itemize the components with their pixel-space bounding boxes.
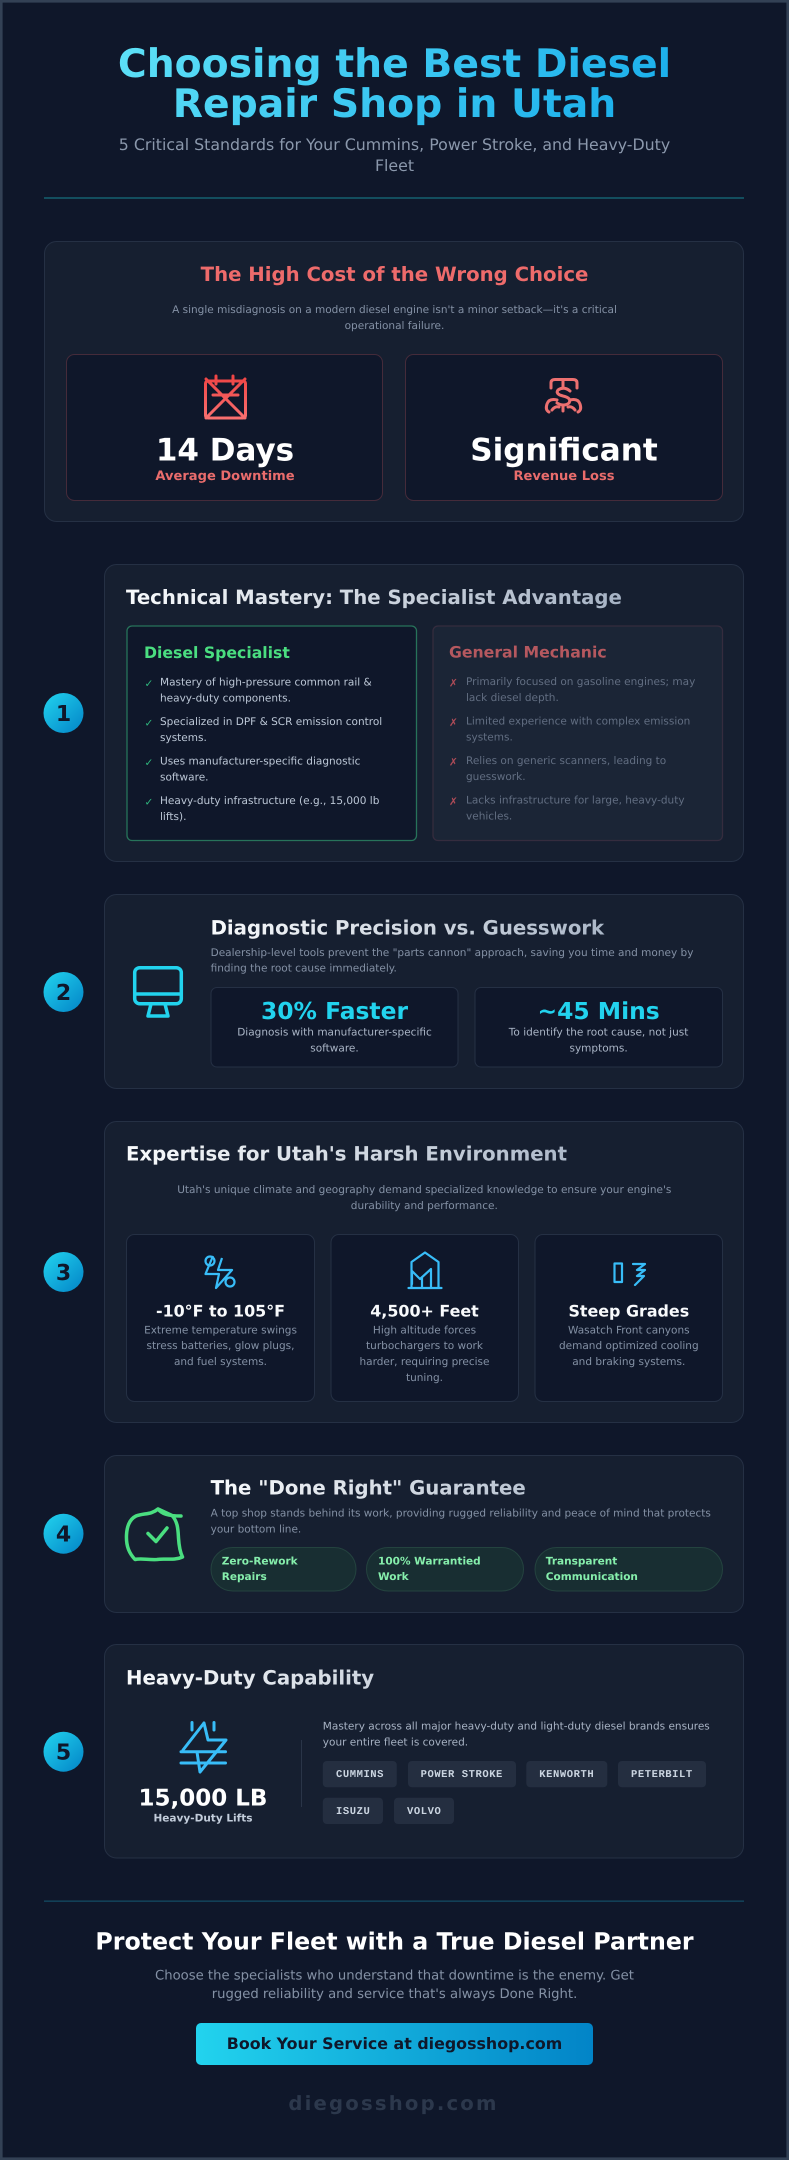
card: altitude: turbochargers to work — [366, 1340, 484, 1352]
text: utah description: Utah's unique climate and geography demand specialized knowledge to ensure your engine's — [177, 1184, 671, 1196]
text: brand coverage: your entire fleet is covered. — [323, 1737, 468, 1749]
stat: 45 minutes: To identify the root cause, not just — [508, 1027, 688, 1039]
brand tags: CUMMINS — [336, 1769, 384, 1781]
stat: 30% faster: software. — [310, 1043, 359, 1055]
list: mechanic weaknesses: Relies on generic scanners, leading to — [466, 755, 666, 767]
text: high cost description — [172, 304, 617, 332]
panel: technical mastery — [104, 564, 744, 862]
stat: 15,000 lb — [139, 1786, 267, 1825]
heading: diagnostic precision: Diagnostic Precision vs. Guesswork — [211, 916, 605, 939]
card: grades: Wasatch Front canyons — [568, 1324, 690, 1336]
brand tags — [323, 1761, 706, 1824]
text: guarantee description: A top shop stands behind its work, providing rugged reliability and peace of mind that protects — [211, 1508, 711, 1520]
text: diagnostic description: Dealership-level tools prevent the "parts cannon" approach, saving you time and money by — [211, 947, 693, 959]
step badge 5 — [44, 1732, 84, 1772]
panel: heavy-duty capability — [104, 1644, 744, 1858]
card: diesel specialist — [127, 626, 416, 840]
card: grades — [535, 1234, 722, 1402]
list: mechanic weaknesses: Lacks infrastructure for large, heavy-duty — [466, 794, 685, 806]
button: book service: Book Your Service at diegosshop.com — [227, 2034, 562, 2053]
list: specialist strengths: software. — [160, 772, 209, 784]
stat: 45 minutes: ~45 Mins — [538, 997, 660, 1025]
button: book service — [196, 2023, 593, 2065]
badge: transparent communication — [535, 1548, 722, 1591]
step badge 1: 1 — [56, 702, 71, 727]
badge: transparent communication: Transparent — [546, 1555, 617, 1567]
stat card: revenue loss: Significant — [470, 432, 658, 468]
list: specialist strengths: ✓ — [144, 796, 153, 808]
stat: 45 minutes — [475, 988, 722, 1067]
icon: monitor — [135, 968, 181, 1016]
badge: warranted work: Work — [378, 1571, 410, 1583]
card: altitude — [331, 1234, 518, 1402]
text: call to action — [155, 1968, 634, 2002]
step badge 3: 3 — [56, 1261, 71, 1286]
card: general mechanic: General Mechanic — [449, 642, 607, 662]
panel: high cost of the wrong choice — [44, 242, 744, 522]
step badge 3 — [44, 1252, 84, 1292]
stat: 30% faster: Diagnosis with manufacturer-specific — [237, 1027, 432, 1039]
icon: temperature swings — [206, 1256, 234, 1288]
card: grades: demand optimized cooling — [559, 1340, 699, 1352]
list: specialist strengths: Uses manufacturer-specific diagnostic — [160, 756, 361, 768]
badge: zero rework — [211, 1548, 356, 1591]
badge: zero rework: Zero-Rework — [222, 1555, 299, 1567]
text: call to action: rugged reliability and service that's always Done Right. — [212, 1987, 577, 2002]
text: utah description — [177, 1184, 671, 1212]
card: general mechanic — [433, 626, 722, 840]
icon: steep grades — [614, 1264, 645, 1285]
heading: call to action: Protect Your Fleet with a True Diesel Partner — [95, 1927, 694, 1955]
text: guarantee description: your bottom line. — [211, 1524, 301, 1536]
list: mechanic weaknesses — [449, 676, 695, 822]
card: diesel specialist: Diesel Specialist — [144, 643, 290, 662]
icon: shield with check — [126, 1509, 182, 1560]
list: mechanic weaknesses: ✗ — [449, 756, 458, 768]
step badge 4: 4 — [56, 1523, 71, 1548]
text: utah description: durability and performance. — [351, 1200, 498, 1212]
card: temperature: and fuel systems. — [174, 1356, 267, 1368]
stat card: average downtime: Average Downtime — [155, 469, 295, 484]
list: specialist strengths — [144, 677, 382, 823]
stat: 30% faster: 30% Faster — [261, 997, 408, 1025]
text: high cost description: operational failure. — [345, 320, 444, 332]
list: specialist strengths: lifts). — [160, 811, 186, 823]
subtitle: Fleet — [375, 156, 414, 175]
text: guarantee description — [211, 1508, 711, 1536]
text: diagnostic description — [211, 947, 693, 975]
list: specialist strengths: ✓ — [144, 678, 153, 690]
step badge 5: 5 — [56, 1741, 71, 1766]
brand tags: VOLVO — [407, 1806, 441, 1818]
title: Choosing the Best Diesel — [118, 42, 671, 87]
subtitle — [119, 135, 670, 175]
card: temperature — [126, 1234, 314, 1402]
icon: calendar crossed out — [206, 376, 246, 418]
step badge 2 — [44, 972, 84, 1012]
icon: altitude — [408, 1252, 442, 1288]
list: specialist strengths: Mastery of high-pressure common rail & — [160, 677, 372, 689]
card: altitude: tuning. — [406, 1372, 443, 1384]
card: temperature: -10°F to 105°F — [156, 1302, 285, 1321]
text: call to action: Choose the specialists who understand that downtime is the enemy. Get — [155, 1968, 634, 1983]
list: mechanic weaknesses: ✗ — [449, 796, 458, 808]
step badge 1 — [44, 693, 84, 733]
card: temperature: stress batteries, glow plugs, — [147, 1340, 294, 1352]
list: specialist strengths: ✓ — [144, 718, 153, 730]
heading: technical mastery: Technical Mastery: The Specialist Advantage — [126, 586, 622, 609]
panel: diagnostic precision — [104, 894, 744, 1088]
heading: heavy-duty capability: Heavy-Duty Capability — [126, 1666, 374, 1689]
text: diagnostic description: finding the root cause immediately. — [211, 963, 397, 975]
badge: warranted work — [366, 1548, 524, 1591]
stat: 15,000 lb: Heavy-Duty Lifts — [153, 1813, 253, 1825]
subtitle: 5 Critical Standards for Your Cummins, Power Stroke, and Heavy-Duty — [119, 135, 670, 154]
list: mechanic weaknesses: ✗ — [449, 717, 458, 729]
list: specialist strengths: ✓ — [144, 757, 153, 769]
heading: high cost: The High Cost of the Wrong Choice — [201, 263, 588, 286]
heading: utah environment: Expertise for Utah's Harsh Environment — [126, 1143, 567, 1166]
brand tags: PETERBILT — [631, 1769, 693, 1781]
list: specialist strengths: systems. — [160, 732, 207, 744]
list: mechanic weaknesses: guesswork. — [466, 771, 526, 783]
brand tags: ISUZU — [336, 1806, 370, 1818]
list: mechanic weaknesses: Primarily focused on gasoline engines; may — [466, 676, 695, 688]
icon: revenue loss — [546, 380, 581, 412]
footer brand: diegosshop.com — [288, 2092, 499, 2115]
stat: 45 minutes: symptoms. — [569, 1043, 628, 1055]
card: altitude: 4,500+ Feet — [370, 1302, 479, 1321]
heading: done right: The "Done Right" Guarantee — [211, 1476, 526, 1499]
list: specialist strengths: Heavy-duty infrastructure (e.g., 15,000 lb — [160, 795, 380, 807]
card: grades: and braking systems. — [572, 1356, 685, 1368]
text: brand coverage — [323, 1721, 710, 1749]
badge: zero rework: Repairs — [222, 1571, 267, 1583]
list: mechanic weaknesses: lack diesel depth. — [466, 692, 559, 704]
list: specialist strengths: Specialized in DPF & SCR emission control — [160, 716, 382, 728]
panel: utah environment — [104, 1122, 744, 1422]
brand tags: POWER STROKE — [421, 1769, 503, 1781]
card: altitude: harder, requiring precise — [359, 1356, 490, 1368]
stat card: average downtime: 14 Days — [156, 432, 294, 468]
step badge 2: 2 — [56, 981, 71, 1006]
badge: warranted work: 100% Warrantied — [378, 1555, 481, 1567]
text: brand coverage: Mastery across all major heavy-duty and light-duty diesel brands ensures — [323, 1721, 710, 1733]
step badge 4 — [44, 1514, 84, 1554]
panel: done right guarantee — [104, 1456, 744, 1612]
list: mechanic weaknesses: Limited experience with complex emission — [466, 716, 690, 728]
text: high cost description: A single misdiagnosis on a modern diesel engine isn't a minor setback—it's a critical — [172, 304, 617, 316]
title — [118, 42, 671, 127]
icon: heavy-duty lift — [181, 1722, 226, 1772]
brand tags: KENWORTH — [539, 1769, 594, 1781]
stat: 30% faster — [211, 988, 458, 1067]
list: mechanic weaknesses: systems. — [466, 731, 513, 743]
card: altitude: High altitude forces — [373, 1324, 476, 1336]
list: specialist strengths: heavy-duty components. — [160, 692, 291, 704]
stat card: revenue loss — [406, 354, 722, 500]
list: mechanic weaknesses: ✗ — [449, 678, 458, 690]
card: temperature: Extreme temperature swings — [144, 1324, 297, 1336]
card: grades: Steep Grades — [568, 1302, 689, 1321]
list: mechanic weaknesses: vehicles. — [466, 810, 512, 822]
title: Repair Shop in Utah — [173, 82, 616, 127]
badge: transparent communication: Communication — [546, 1571, 638, 1583]
stat card: average downtime — [66, 354, 382, 500]
stat: 15,000 lb: 15,000 LB — [139, 1786, 267, 1812]
stat card: revenue loss: Revenue Loss — [513, 469, 615, 484]
